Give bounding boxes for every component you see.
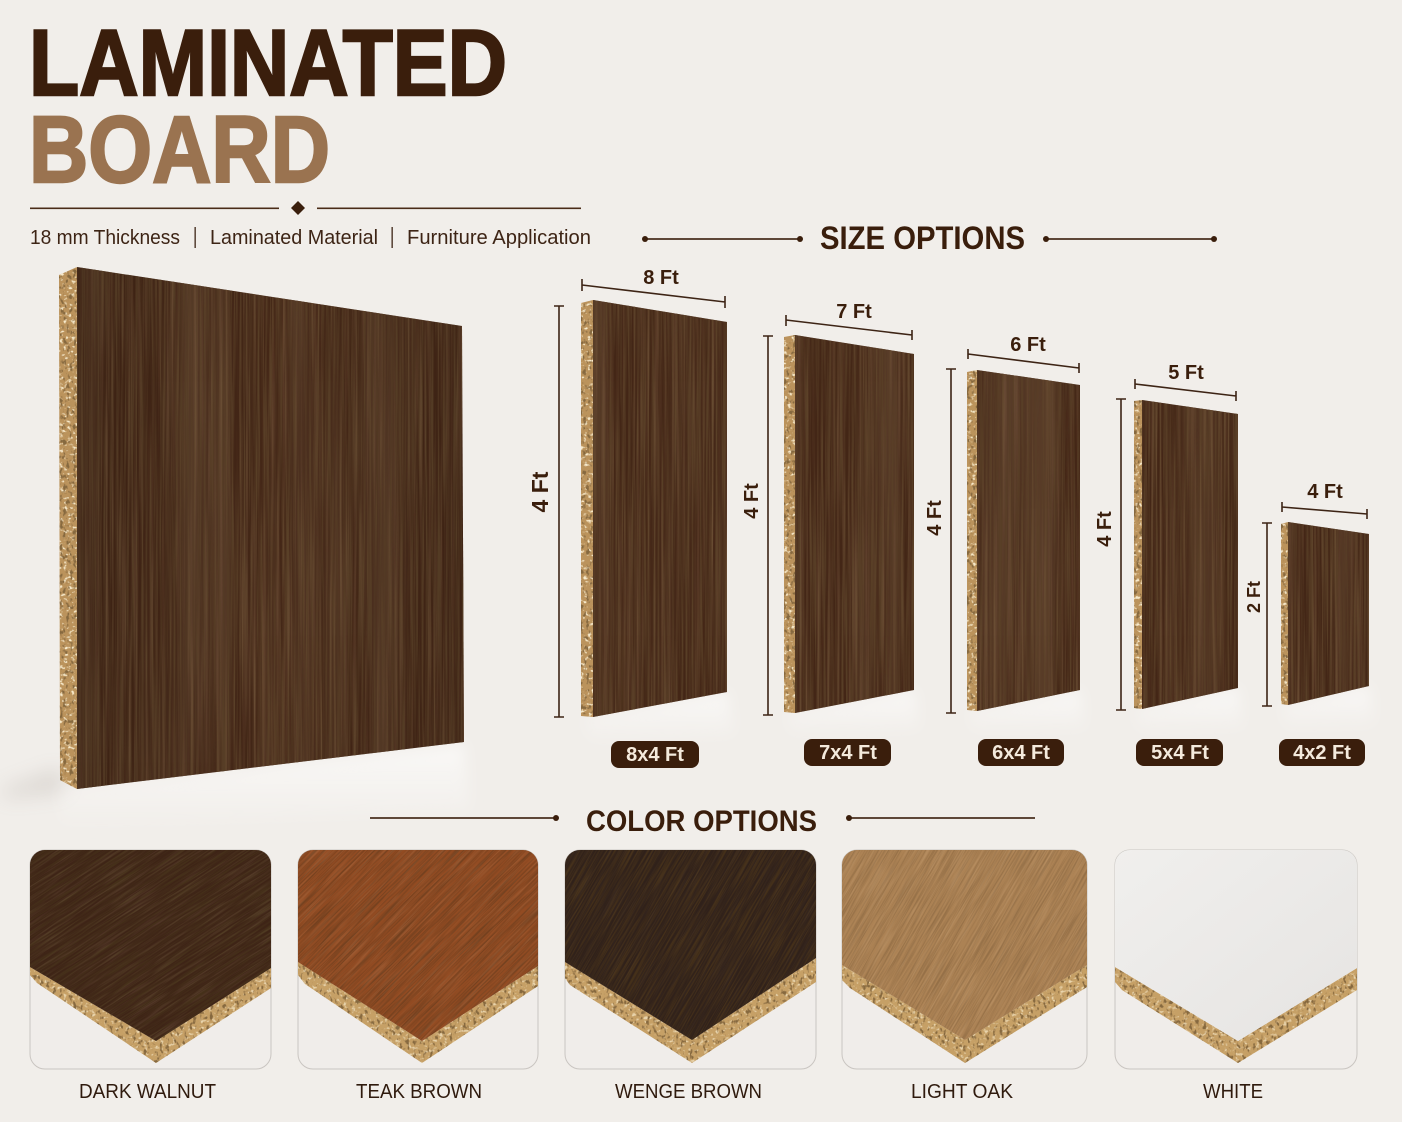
subtitle: Furniture Application [407, 227, 591, 249]
swatch names [79, 1081, 1263, 1103]
swatch edge [842, 965, 1087, 1063]
size label: 8x4 Ft: 8x4 Ft [626, 744, 684, 766]
swatch edge [1115, 960, 1357, 1065]
board: 4x2 [1279, 520, 1371, 707]
swatch card: light oak [842, 850, 1087, 1069]
size label: 4x2 Ft [1279, 739, 1365, 766]
heading: color options: COLOR OPTIONS [586, 805, 817, 838]
swatch edge [565, 950, 816, 1065]
size label: 4x2 Ft: 4x2 Ft [1293, 742, 1351, 764]
dimensions: 7x4: 7 Ft [836, 301, 872, 323]
swatch card: white [1115, 850, 1357, 1069]
swatch names: DARK WALNUT [79, 1081, 216, 1103]
dimensions: 7x4 [741, 301, 912, 715]
board: 5x4 [1132, 398, 1240, 711]
main board chipboard edge [59, 267, 77, 789]
swatch card: wenge brown [565, 850, 816, 1069]
swatch face [30, 850, 271, 1045]
swatch names: TEAK BROWN [356, 1081, 482, 1103]
size label: 6x4 Ft [978, 739, 1064, 766]
size label: 7x4 Ft [804, 739, 891, 766]
dimensions: 4x2: 4 Ft [1307, 481, 1343, 503]
dimensions: 8x4: 8 Ft [643, 267, 679, 289]
dimensions: 5x4: 5 Ft [1168, 362, 1204, 384]
swatch names: WHITE [1203, 1081, 1263, 1103]
dimensions: 5x4 [1094, 362, 1236, 710]
swatch face [565, 850, 816, 1045]
dimensions: 4x2: 2 Ft [1244, 581, 1264, 613]
size label: 5x4 Ft [1136, 739, 1223, 766]
swatch card: teak brown [298, 850, 538, 1069]
dimensions: 6x4 [924, 334, 1079, 713]
subtitle: Laminated Material [210, 227, 378, 249]
swatch card: dark walnut [30, 850, 271, 1069]
swatch edge [30, 960, 271, 1065]
floor reflections and shadows [0, 686, 1375, 830]
dimensions: 8x4: 4 Ft [527, 471, 553, 512]
size label: 6x4 Ft: 6x4 Ft [992, 742, 1050, 764]
dimensions: 6x4: 4 Ft [924, 500, 946, 536]
heading: color options [370, 805, 1035, 838]
swatch edge [298, 955, 538, 1065]
board: 6x4 [965, 368, 1083, 713]
title [29, 10, 507, 203]
main board [55, 260, 467, 795]
dimensions: 8x4 [527, 267, 725, 717]
dimensions: 4x2 [1244, 481, 1367, 706]
swatch face [298, 850, 538, 1045]
heading: size options: SIZE OPTIONS [820, 220, 1025, 256]
subtitle [30, 227, 591, 249]
dimensions: 5x4: 4 Ft [1094, 511, 1116, 547]
board: 7x4 [782, 333, 917, 715]
main board laminate face [75, 262, 467, 792]
swatch face [1115, 850, 1357, 1041]
subtitle: 18 mm Thickness [30, 227, 180, 249]
title: BOARD [29, 97, 330, 203]
size label: 5x4 Ft: 5x4 Ft [1151, 742, 1209, 764]
size label: 8x4 Ft [611, 741, 699, 768]
title: LAMINATED [29, 10, 507, 115]
board: 8x4 [578, 298, 730, 720]
heading: size options [642, 220, 1217, 256]
swatch names: WENGE BROWN [615, 1081, 762, 1103]
swatch face [842, 850, 1087, 1045]
dimensions: 7x4: 4 Ft [741, 483, 763, 519]
swatch names: LIGHT OAK [911, 1081, 1014, 1103]
title divider [30, 201, 581, 215]
size label: 7x4 Ft: 7x4 Ft [819, 742, 877, 764]
dimensions: 6x4: 6 Ft [1010, 334, 1046, 356]
